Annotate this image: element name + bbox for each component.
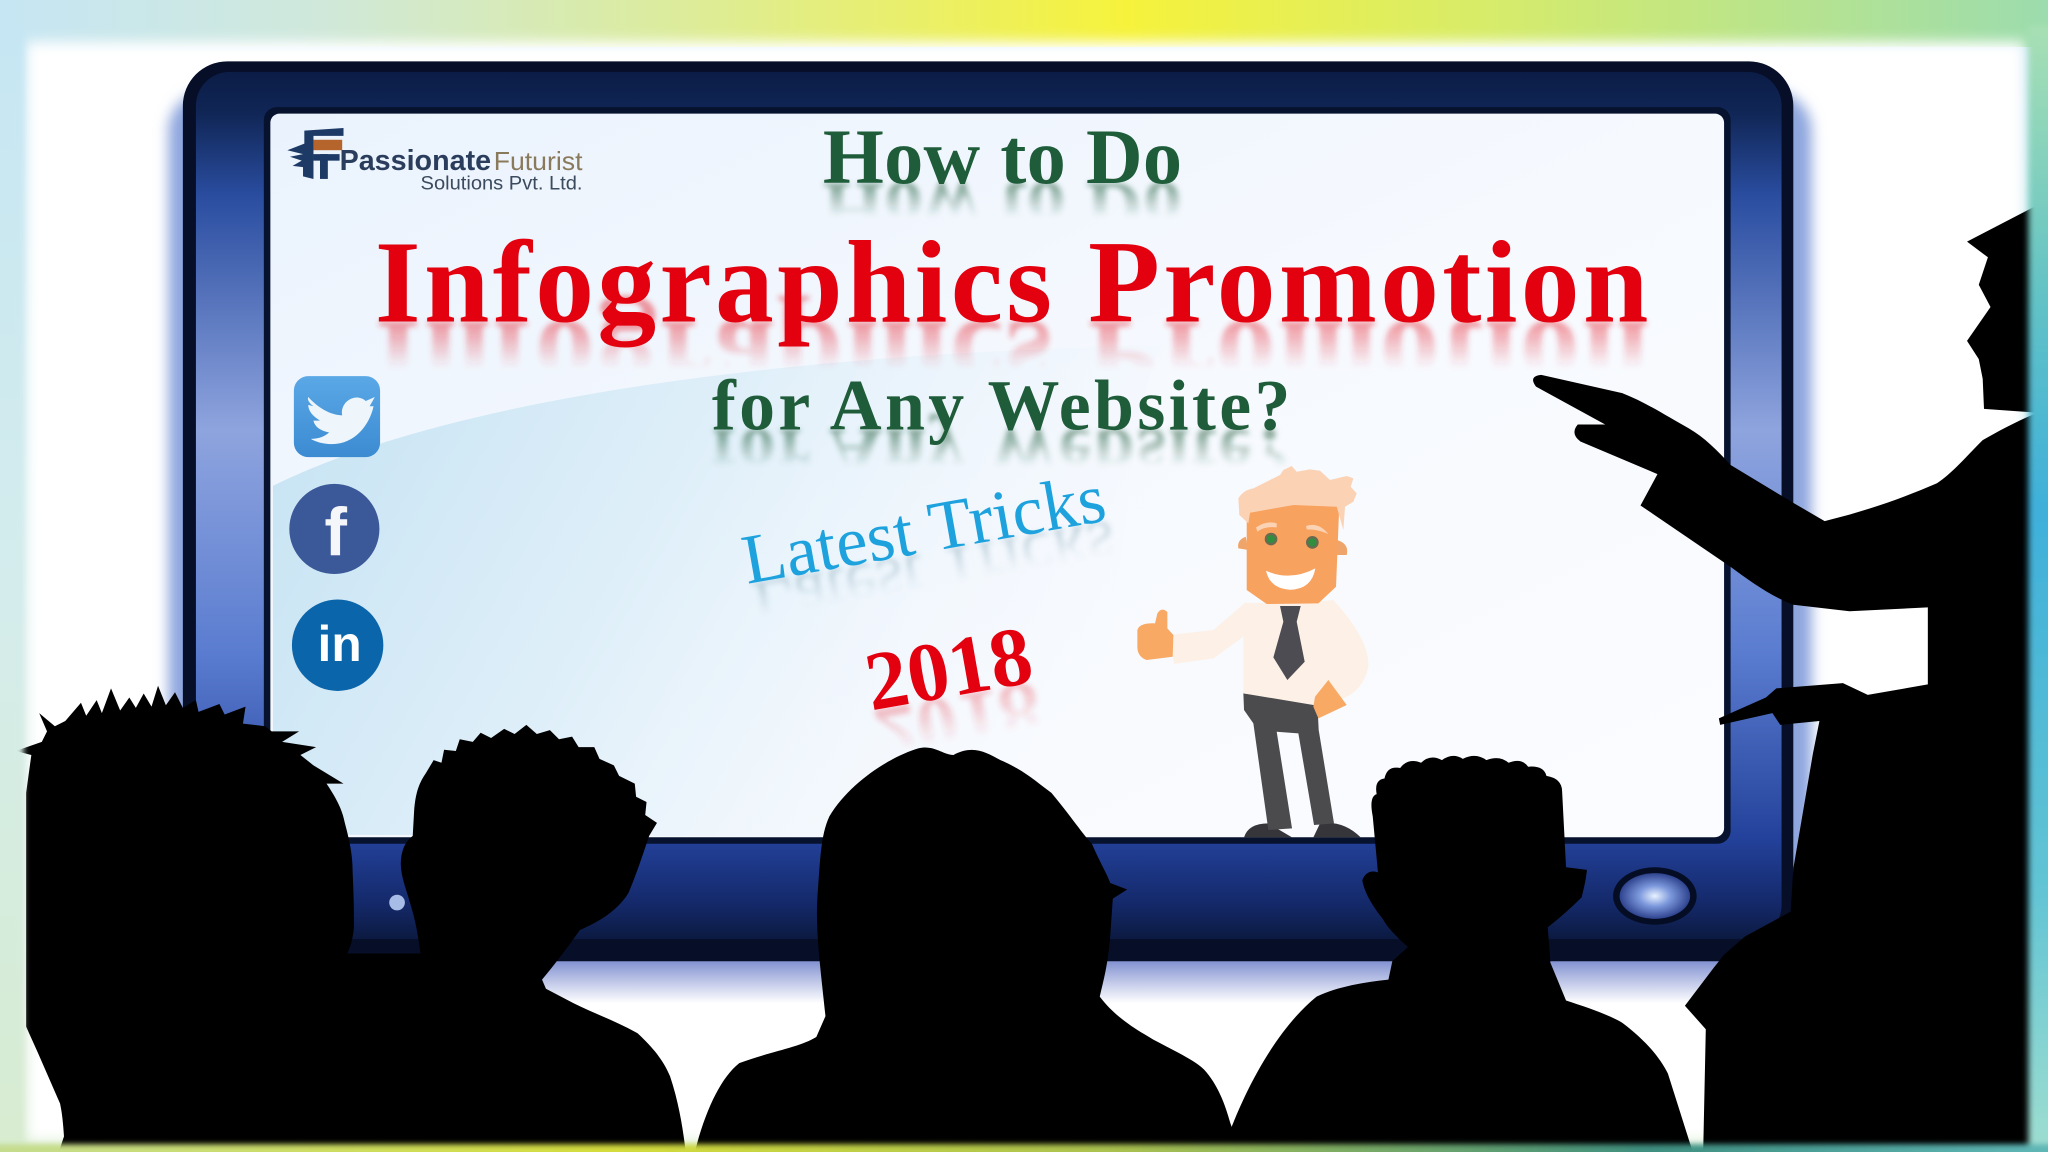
title line: Infographics Promotion: Infographics Promotion: [375, 217, 1648, 347]
icon: linkedin: in: [318, 616, 362, 672]
silhouette: audience member 4: [1223, 756, 1693, 1152]
monitor: [168, 61, 1812, 1004]
title reflections: Infographics Promotion: [375, 295, 1648, 427]
company name second word: Futurist: [494, 146, 583, 176]
hair: [1238, 466, 1357, 530]
eyes: [1265, 533, 1319, 549]
2018 text: 2018: [859, 610, 1039, 729]
shoes: [1244, 823, 1361, 837]
Latest Tricks text: Latest Tricks: [736, 459, 1111, 600]
company name: Passionate: [340, 145, 491, 177]
silhouette: audience member 3: [695, 748, 1241, 1152]
smile: [1266, 568, 1315, 590]
cartoon businessman giving thumbs up: [1137, 466, 1368, 837]
company suffix: Solutions Pvt. Ltd.: [421, 172, 583, 194]
icon: facebook: f: [324, 495, 347, 570]
ears: [1238, 537, 1347, 555]
monitor large button: [1613, 867, 1697, 925]
title reflections: How to Do: [823, 166, 1182, 253]
icon: twitter: [294, 376, 380, 457]
logo mark: [287, 128, 344, 179]
shirt: [1169, 600, 1368, 705]
logo: Passionate Futurist: [287, 128, 583, 194]
title line: for Any Website?: for Any Website?: [712, 366, 1290, 446]
hands: [1137, 610, 1347, 718]
screen: [270, 114, 1724, 837]
title reflections: for Any Website?: [712, 414, 1290, 495]
2018 reflection: 2018: [868, 663, 1048, 782]
title reflections: [375, 166, 1648, 495]
title line: How to Do: How to Do: [823, 113, 1182, 200]
Latest Tricks reflection: Latest Tricks: [747, 504, 1122, 645]
face: [1247, 503, 1339, 604]
monitor small button: [389, 895, 405, 910]
silhouette: audience member 1 and 2: [16, 686, 686, 1152]
eyebrows: [1256, 522, 1328, 534]
tie: [1273, 606, 1305, 680]
silhouette: presenter: [1533, 205, 2038, 1152]
icon: facebook: [289, 484, 379, 574]
trousers: [1243, 693, 1334, 830]
icon: linkedin: [292, 600, 383, 691]
